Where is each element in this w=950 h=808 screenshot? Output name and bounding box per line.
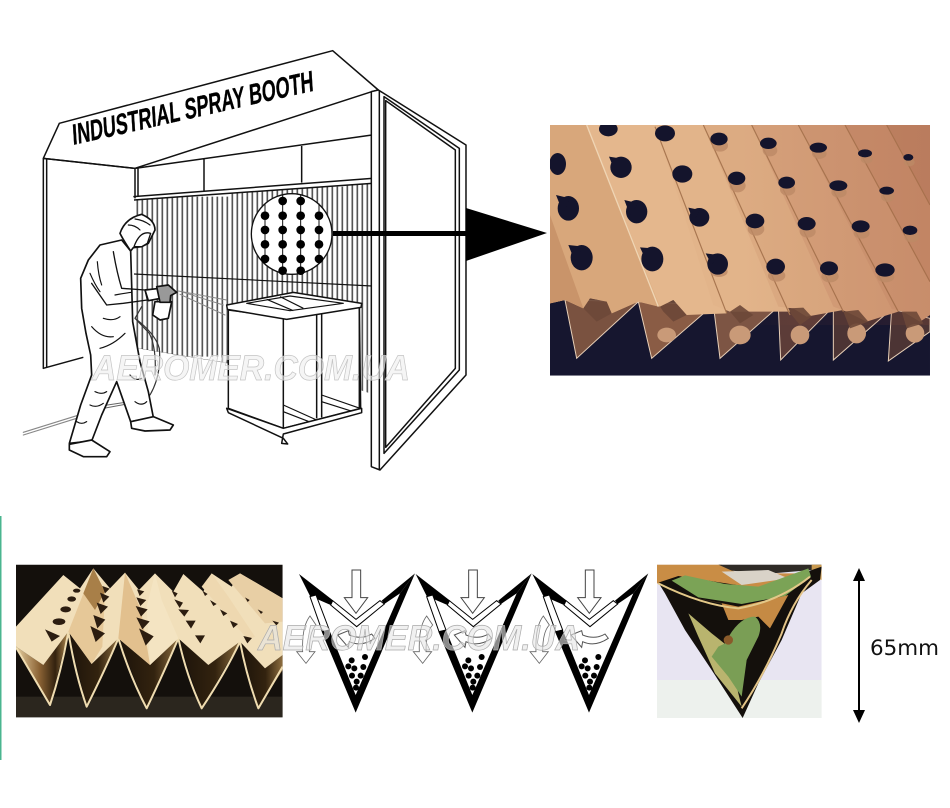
watermark bottom: AEROMER.COM.UA xyxy=(257,619,580,658)
floor hose xyxy=(23,416,77,435)
dimension label: 65mm xyxy=(870,636,939,660)
photo: pleat filled with green paint dust xyxy=(657,565,822,718)
air hose xyxy=(127,307,160,404)
photo: pleated filter side view xyxy=(16,565,283,717)
illustration: industrial spray booth xyxy=(43,51,466,470)
painter in coverall with spray gun xyxy=(23,214,227,457)
cabinet being sprayed xyxy=(227,292,362,444)
booth roof and header xyxy=(43,51,378,200)
left wall xyxy=(43,158,135,368)
pleat interior panels xyxy=(16,632,283,708)
pleat edges xyxy=(16,632,283,708)
arrow from booth to photo xyxy=(333,208,547,261)
front scallops xyxy=(583,298,923,328)
hood xyxy=(120,214,155,251)
pleat V pieces xyxy=(565,300,930,361)
magnified perforation circle xyxy=(251,194,332,275)
diagram: airflow through pleat, V 2 xyxy=(413,570,532,713)
back wall slats xyxy=(134,183,367,397)
right frame xyxy=(371,90,466,470)
booth title: INDUSTRIAL SPRAY BOOTH xyxy=(71,66,314,152)
boots xyxy=(69,440,110,457)
hole shadows xyxy=(710,140,919,282)
holes xyxy=(45,586,279,646)
pleat sheet xyxy=(550,125,930,322)
watermark top: AEROMER.COM.UA xyxy=(91,349,410,388)
holes xyxy=(549,122,917,277)
left green edge line xyxy=(0,516,2,760)
coverall body xyxy=(69,240,153,443)
diagram: airflow through pleat, V 1 xyxy=(297,570,415,713)
pleat top surfaces xyxy=(16,568,283,668)
dimension arrow xyxy=(853,568,865,723)
spray gun xyxy=(153,302,172,320)
diagram: airflow through pleat, V 3 xyxy=(530,570,648,713)
photo: filter pleats with holes, close-up xyxy=(549,122,930,376)
spray cone xyxy=(178,291,227,315)
